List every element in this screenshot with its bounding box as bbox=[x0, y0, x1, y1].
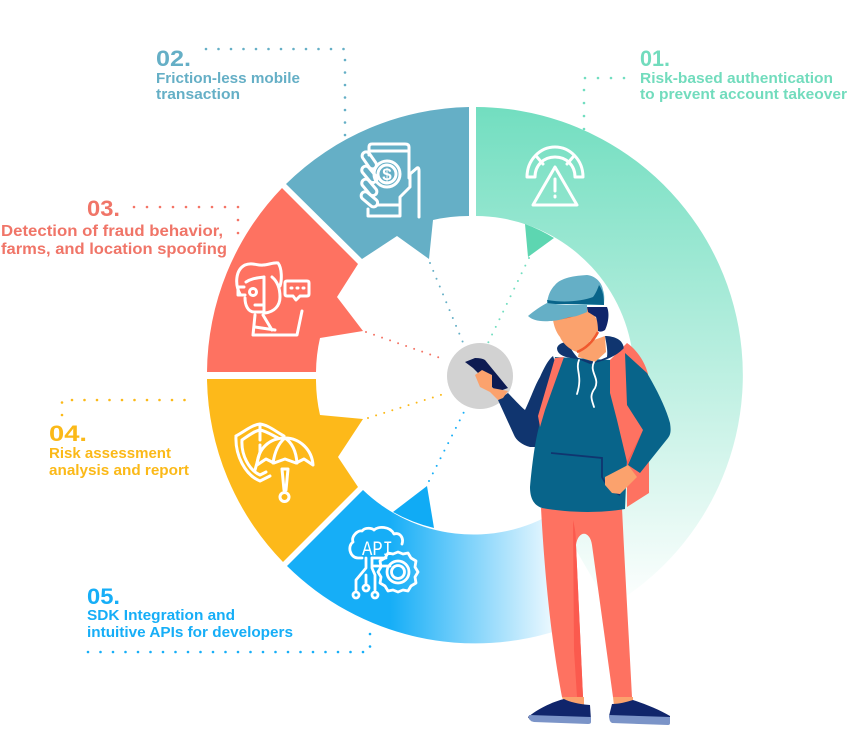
gray centre circle bbox=[447, 343, 513, 409]
text 04 line 1: Risk assessment bbox=[49, 445, 171, 462]
segment 03: coral wedge bbox=[207, 188, 363, 372]
jaw shadow bbox=[577, 332, 598, 352]
number 02: 02. bbox=[156, 46, 191, 71]
segment 01: green ring bbox=[476, 107, 743, 607]
number 04: 04. bbox=[49, 421, 87, 446]
icon: hand with phone and dollar coin bbox=[360, 144, 419, 217]
hair bbox=[587, 307, 608, 332]
hoodie body bbox=[530, 357, 627, 512]
green notch triangle bbox=[525, 224, 554, 257]
face bbox=[553, 308, 598, 352]
icon: API cloud with gear and circuit bbox=[350, 527, 418, 598]
left shoe bbox=[528, 699, 591, 720]
dotted connector: 04 bbox=[62, 400, 192, 415]
left sole bbox=[529, 715, 591, 724]
label 04 bbox=[49, 421, 189, 479]
pants bbox=[541, 508, 632, 697]
green band bbox=[476, 107, 743, 607]
text 03 line 2: farms, and location spoofing bbox=[1, 241, 227, 258]
hood bbox=[557, 336, 624, 364]
text 01 line 1: Risk-based authentication bbox=[640, 70, 833, 87]
label 05 bbox=[87, 584, 293, 641]
dotted connector: 03 bbox=[134, 207, 238, 246]
cap crown bbox=[547, 275, 604, 305]
near sleeve bbox=[625, 353, 671, 473]
segment 04: yellow wedge bbox=[207, 379, 363, 562]
hoodie strings bbox=[577, 360, 596, 407]
pocket line bbox=[551, 453, 620, 495]
segment 02: teal wedge bbox=[286, 107, 469, 259]
blue band shape bbox=[287, 490, 565, 643]
number 01: 01. bbox=[640, 46, 670, 71]
text 05 line 1: SDK Integration and bbox=[87, 607, 235, 624]
number 05: 05. bbox=[87, 584, 120, 609]
face shadow under visor bbox=[552, 307, 587, 320]
dotted connector: 01 bbox=[584, 78, 624, 130]
icon: API cloud with gear and circuit: API bbox=[362, 539, 393, 562]
dotted connector: 02 bbox=[206, 49, 345, 138]
blue notch triangle bbox=[393, 486, 434, 528]
text 02 line 1: Friction-less mobile bbox=[156, 70, 300, 87]
icon: shield with umbrella and exclamation bbox=[236, 424, 313, 502]
label 03 bbox=[1, 196, 227, 258]
holding hand bbox=[475, 370, 508, 400]
cap band bbox=[547, 285, 604, 305]
right shoe bbox=[609, 700, 670, 720]
icon: hand with phone and dollar coin: $ bbox=[382, 165, 392, 184]
right sole bbox=[609, 715, 670, 725]
backpack shade bbox=[627, 405, 643, 466]
backpack bbox=[610, 343, 649, 507]
phone bbox=[465, 358, 508, 392]
person illustration bbox=[465, 275, 671, 725]
far arm bbox=[498, 356, 558, 447]
backpack strap left bbox=[538, 357, 564, 427]
icon: two-faced man with speech bubble and laptop bbox=[237, 263, 309, 335]
neck bbox=[578, 336, 606, 362]
pants shade bbox=[573, 520, 583, 697]
backpack strap right bbox=[610, 352, 643, 462]
cap visor bbox=[528, 303, 587, 321]
pocket hand bbox=[605, 465, 637, 494]
icon: gauge warning bbox=[527, 147, 583, 205]
segment 05: blue band bbox=[287, 486, 565, 643]
ankles bbox=[562, 697, 633, 706]
label 02 bbox=[156, 46, 300, 103]
text 05 line 2: intuitive APIs for developers bbox=[87, 624, 293, 641]
label 01 bbox=[640, 46, 847, 103]
number 03: 03. bbox=[87, 196, 120, 221]
text 02 line 2: transaction bbox=[156, 86, 240, 103]
dotted rays to centre bbox=[366, 258, 529, 481]
text 03 line 1: Detection of fraud behavior, bbox=[1, 223, 223, 240]
dotted connector: 05 bbox=[88, 630, 370, 652]
text 01 line 2: to prevent account takeover bbox=[640, 86, 847, 103]
text 04 line 2: analysis and report bbox=[49, 462, 189, 479]
